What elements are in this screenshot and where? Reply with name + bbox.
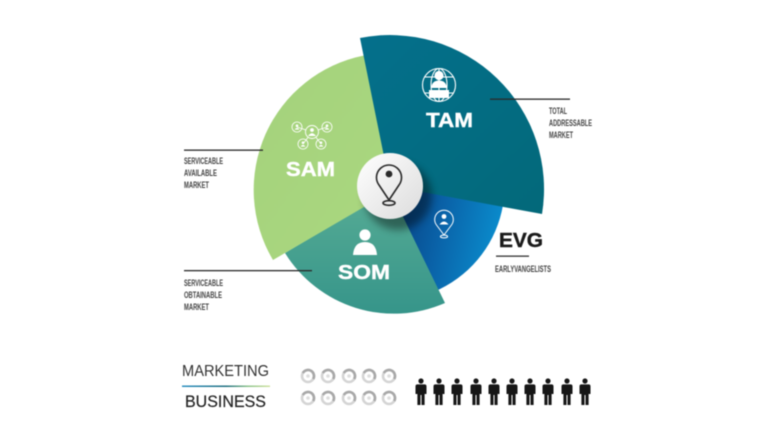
callout: serviceable obtainable market (184, 270, 312, 313)
segment: TAM (360, 35, 544, 214)
label: Earlyvangelists: EARLYVANGELISTS (495, 264, 551, 275)
callout: serviceable obtainable market: MARKET (184, 302, 209, 313)
callout: total addressable market: MARKET (549, 130, 573, 141)
rule under EVG (496, 256, 529, 257)
callout: serviceable available market (184, 150, 263, 191)
pie chart (254, 35, 544, 314)
icon: person (353, 229, 377, 255)
icon: people network (292, 122, 332, 149)
callout: serviceable obtainable market: OBTAINABLE (184, 290, 222, 301)
callout: serviceable obtainable market: SERVICEABLE (184, 278, 223, 289)
footer title: marketing business (182, 363, 270, 411)
footer title: marketing business: BUSINESS (185, 392, 266, 411)
label: TAM: TAM (426, 110, 473, 132)
callout: total addressable market: TOTAL (549, 106, 567, 117)
progress dials (302, 370, 395, 404)
icon: EVG pin (435, 210, 453, 238)
label: SOM: SOM (338, 262, 390, 284)
footer title: marketing business: MARKETING (182, 363, 269, 380)
hub shadow (364, 162, 432, 230)
label: EVG: EVG (499, 230, 543, 252)
icon: centre location pin (376, 165, 402, 205)
callout: total addressable market: ADDRESSABLE (549, 118, 592, 129)
callout: serviceable available market: SERVICEABLE (184, 156, 223, 167)
callout: serviceable available market: MARKET (184, 180, 209, 191)
segment: SAM (254, 56, 400, 260)
callout: total addressable market (490, 98, 592, 141)
callout: serviceable available market: AVAILABLE (184, 168, 217, 179)
label: SAM: SAM (286, 159, 335, 181)
centre hub (357, 153, 423, 219)
segment: EVG (385, 180, 503, 291)
row of people (416, 378, 590, 405)
icon: globe with people (422, 68, 456, 102)
segment: SOM (285, 190, 445, 314)
